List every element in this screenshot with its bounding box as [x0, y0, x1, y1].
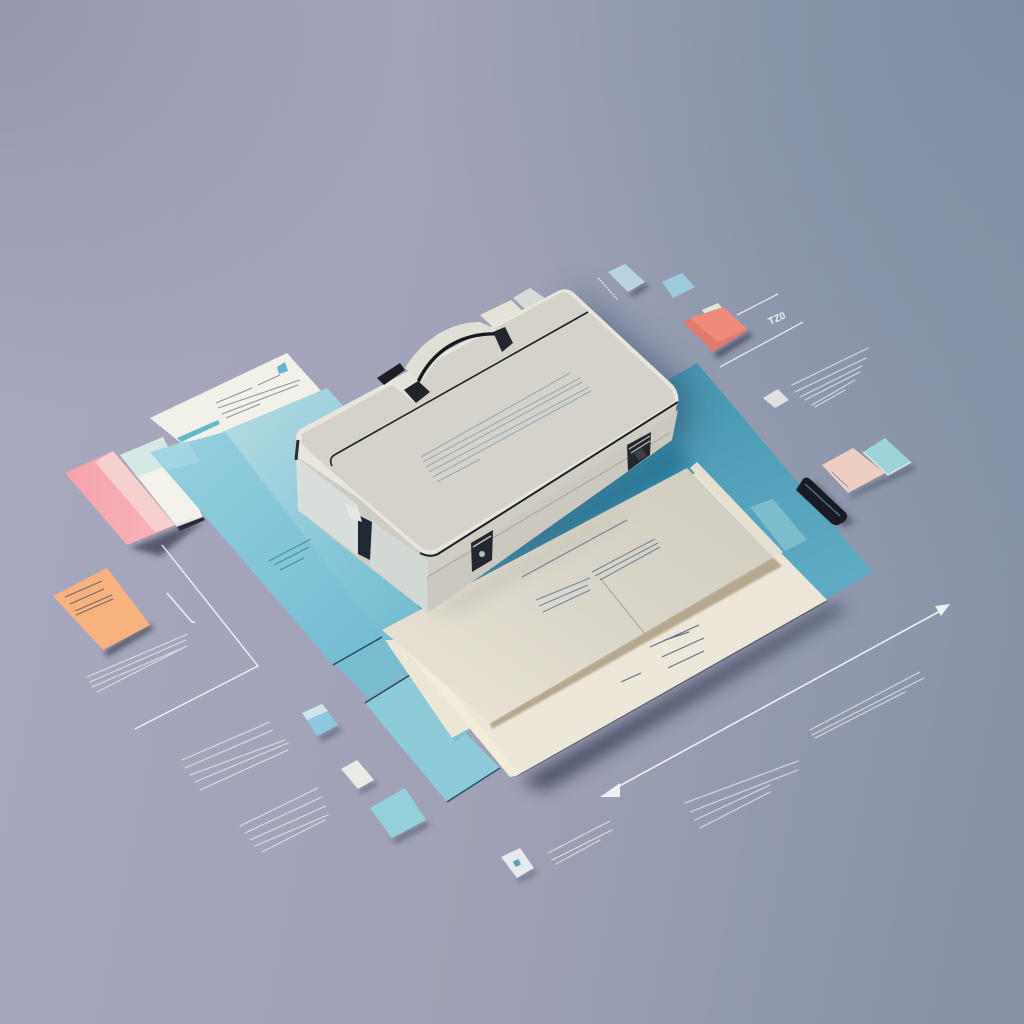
icon: tile top two	[662, 273, 695, 298]
icon: white tile lower	[341, 760, 374, 789]
icon: white tile right	[763, 389, 789, 408]
icon: coral folder	[683, 303, 748, 352]
briefcase lid	[296, 289, 678, 556]
sheet: lower cream	[400, 470, 827, 777]
shadow: pink card	[130, 520, 205, 556]
icon: blue tile lower	[302, 704, 338, 736]
text lines: upper right	[792, 348, 868, 407]
label: upper right: TZ0	[767, 310, 788, 328]
text lines: bottom center	[548, 821, 612, 864]
briefcase latch left	[471, 530, 493, 572]
shadow: peach and teal cards	[850, 465, 915, 497]
leader lines: upper right	[720, 294, 803, 367]
shadow: briefcase	[440, 285, 690, 620]
text lines: bottom right one	[685, 761, 798, 828]
panel: orange card	[53, 568, 150, 650]
shadow: coral folder	[714, 332, 752, 358]
briefcase lid lines	[421, 373, 591, 482]
icon: small white tile bottom	[501, 848, 534, 878]
briefcase	[296, 289, 678, 613]
icon: black pen	[796, 478, 847, 525]
sheet: back layer	[385, 640, 472, 738]
text lines: below orange card	[87, 634, 188, 692]
panel: large blue sheet right	[400, 363, 873, 610]
sheet: upper cream	[382, 462, 783, 723]
dotted line: top	[598, 278, 618, 300]
leader line: L-shaped	[135, 545, 258, 729]
panel: pink card	[65, 451, 175, 545]
panel: white document top left	[150, 353, 322, 448]
panel: paper tabs behind briefcase	[480, 288, 545, 330]
shadow: small lower tiles	[318, 727, 537, 882]
shadow: orange card	[104, 625, 154, 656]
briefcase latch right	[627, 432, 651, 471]
panel: blue sheet bottom	[365, 675, 500, 802]
panel: blue sheet lower segment	[333, 637, 412, 698]
panel: blue sheet left	[150, 432, 382, 665]
text lines: lower left two	[240, 788, 328, 852]
panel: paper stack	[382, 462, 827, 777]
icon: tile top one	[608, 264, 648, 296]
panel: white sheet behind pink card	[120, 437, 205, 531]
leader line: short	[167, 593, 195, 622]
icon: teal tile lower	[370, 788, 426, 838]
briefcase handle	[377, 322, 513, 403]
text lines: lower left one	[182, 722, 288, 790]
arrow: long double headed	[600, 604, 950, 797]
shadow: top sheet edge	[490, 557, 782, 729]
text lines: bottom right two	[810, 672, 924, 738]
shadow: paper stack	[520, 606, 850, 790]
icon: peach card	[822, 448, 885, 493]
shadow: black pen	[800, 482, 855, 528]
panel: light blue sheet	[222, 388, 440, 642]
icon: teal card	[863, 438, 911, 475]
briefcase body	[296, 395, 678, 613]
